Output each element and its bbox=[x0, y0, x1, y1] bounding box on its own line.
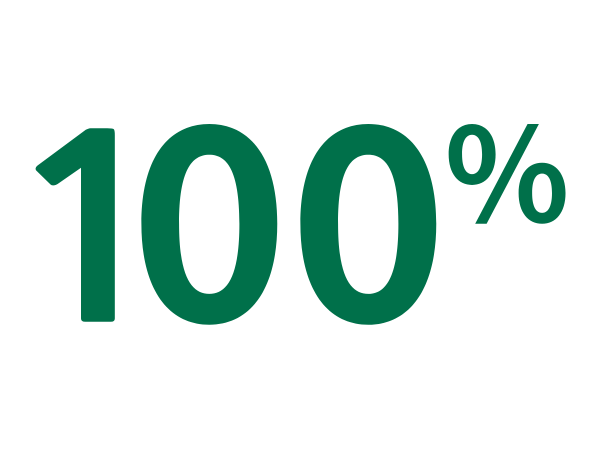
heading: 100%: 0 bbox=[130, 11, 289, 399]
heading: 100%: 1 bbox=[0, 107, 187, 359]
heading: 100%: 0 bbox=[288, 11, 448, 399]
heading: 100%: % bbox=[444, 72, 570, 260]
